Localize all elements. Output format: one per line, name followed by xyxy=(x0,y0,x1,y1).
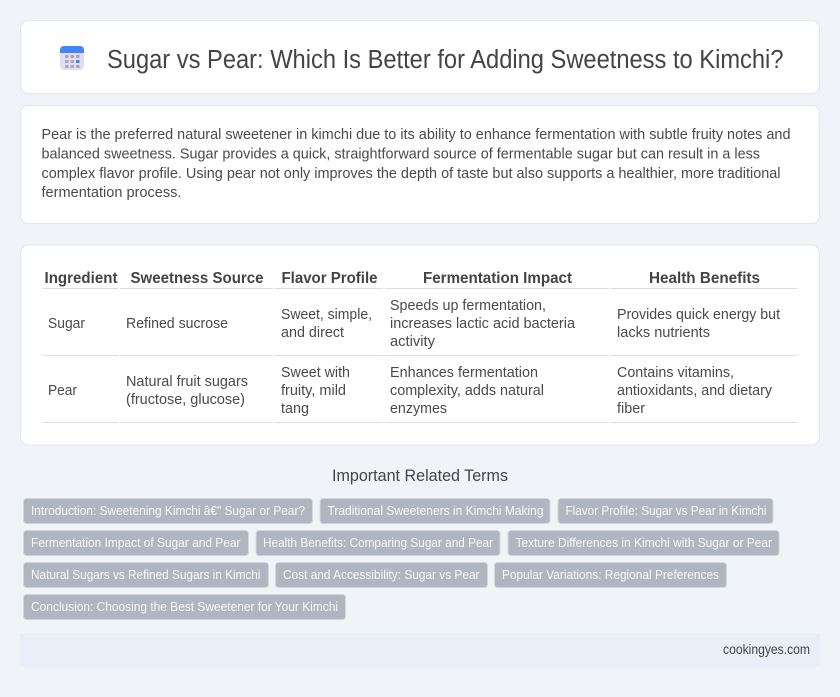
text block: summary xyxy=(42,127,790,201)
table row: sugar: Provides quick energy but xyxy=(617,307,780,323)
table header xyxy=(44,270,760,287)
tag: flavor profile xyxy=(558,498,773,524)
panel: summary paragraph xyxy=(20,106,820,224)
table header: Sweetness Source xyxy=(130,270,264,287)
table header: Ingredient xyxy=(44,270,118,287)
table header: Health Benefits xyxy=(649,270,760,287)
table row: sugar: Speeds up fermentation, xyxy=(390,298,546,314)
table row: sugar: increases lactic acid bacteria xyxy=(390,316,576,332)
table row: pear: fiber xyxy=(617,401,645,417)
tag: conclusion: Conclusion: Choosing the Best Sweetener for Your Kimchi xyxy=(31,600,338,614)
table row: pear: fruity, mild xyxy=(281,383,346,399)
tag: conclusion xyxy=(24,594,346,620)
tag: popular variations xyxy=(494,562,726,588)
tag: traditional sweeteners xyxy=(320,498,550,524)
table row: pear: Natural fruit sugars xyxy=(126,374,248,390)
table row: pear: Pear xyxy=(48,383,77,399)
table row: pear: Contains vitamins, xyxy=(617,365,734,381)
table row: pear: (fructose, glucose) xyxy=(126,392,245,408)
table row: sugar: Refined sucrose xyxy=(126,316,228,332)
tag: texture differences xyxy=(508,530,779,556)
text block: summary: balanced sweetness. Sugar provides a quick, straightforward source of fermentable sugar but can result in a less xyxy=(42,146,760,162)
panel: comparison table xyxy=(20,245,820,445)
text block: summary: fermentation process. xyxy=(42,185,182,201)
tag: natural vs refined: Natural Sugars vs Refined Sugars in Kimchi xyxy=(31,568,260,582)
footer xyxy=(20,633,820,667)
table row: sugar: and direct xyxy=(281,325,344,341)
tag: health benefits: Health Benefits: Comparing Sugar and Pear xyxy=(263,536,493,550)
table row: sugar: lacks nutrients xyxy=(617,325,710,341)
tag: introduction xyxy=(24,498,312,524)
footer source: cookingyes.com xyxy=(723,642,810,657)
panel: related term tags xyxy=(24,498,779,620)
table row: sugar: Sweet, simple, xyxy=(281,307,372,323)
tag: natural vs refined xyxy=(24,562,268,588)
tag: fermentation impact: Fermentation Impact of Sugar and Pear xyxy=(31,536,240,550)
tag: popular variations: Popular Variations: Regional Preferences xyxy=(502,568,719,582)
table row: sugar: activity xyxy=(390,334,436,350)
table row: pear: antioxidants, and dietary xyxy=(617,383,773,399)
tag: traditional sweeteners: Traditional Sweeteners in Kimchi Making xyxy=(328,504,544,518)
table row: sugar xyxy=(48,298,780,350)
panel: title card xyxy=(20,20,820,94)
table row: pear: enzymes xyxy=(390,401,447,417)
table row: pear: Sweet with xyxy=(281,365,350,381)
table header: Flavor Profile xyxy=(282,270,378,287)
table row: pear: complexity, adds natural xyxy=(390,383,544,399)
tag: cost and accessibility xyxy=(276,562,488,588)
table row: pear xyxy=(48,365,773,417)
table row: sugar: Sugar xyxy=(48,316,85,332)
text block: summary: Pear is the preferred natural sweetener in kimchi due to its ability to enhance fermentation with subtle fruity notes and xyxy=(42,127,790,143)
icon: calendar xyxy=(60,46,84,70)
tag: flavor profile: Flavor Profile: Sugar vs Pear in Kimchi xyxy=(566,504,766,518)
table row: pear: Enhances fermentation xyxy=(390,365,538,381)
tag: fermentation impact xyxy=(24,530,248,556)
tag: texture differences: Texture Differences in Kimchi with Sugar or Pear xyxy=(516,536,772,550)
title: Sugar vs Pear: Which Is Better for Adding Sweetness to Kimchi? xyxy=(107,46,784,74)
heading: important related terms: Important Related Terms xyxy=(332,467,508,485)
text block: summary: complex flavor profile. Using pear not only improves the depth of taste but also supports a healthier, more traditional xyxy=(42,166,780,182)
tag: cost and accessibility: Cost and Accessibility: Sugar vs Pear xyxy=(283,568,480,582)
tag: health benefits xyxy=(256,530,500,556)
table header: Fermentation Impact xyxy=(423,270,573,287)
table row: pear: tang xyxy=(281,401,309,417)
tag: introduction: Introduction: Sweetening Kimchi â€" Sugar or Pear? xyxy=(31,504,305,518)
